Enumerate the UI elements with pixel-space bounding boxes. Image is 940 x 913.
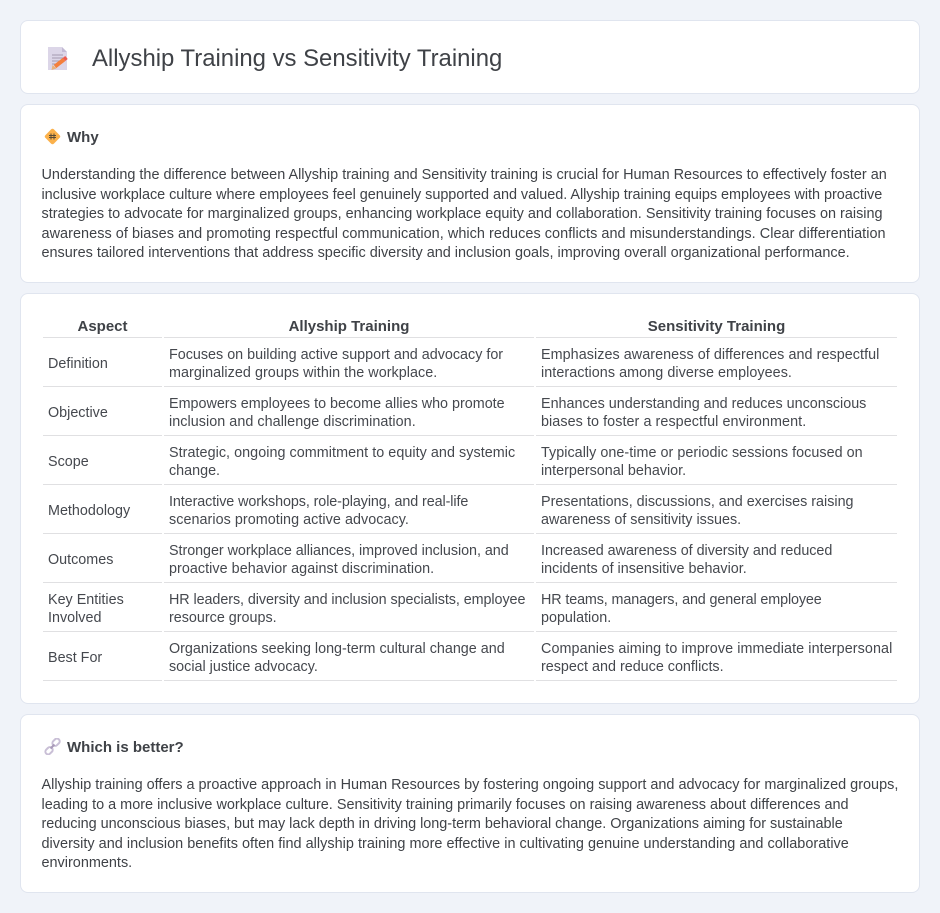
- row: methodology: awareness of sensitivity issues.: [541, 512, 741, 528]
- text block: which is better: Allyship training offers a proactive approach in Human Resources by fostering ongoing support and advocacy for marginalized groups,: [42, 777, 898, 793]
- text block: which is better: environments.: [42, 855, 132, 871]
- text block: which is better: [42, 777, 898, 871]
- text block: which is better: leading to a more inclusive workplace culture. Sensitivity training primarily focuses on raising awareness about differences and: [42, 796, 849, 812]
- row: methodology: [43, 494, 897, 534]
- table header: [43, 318, 897, 338]
- row: scope: change.: [169, 463, 220, 479]
- icon: warning diamond: [44, 128, 60, 144]
- title: Allyship Training vs Sensitivity Training: [92, 45, 502, 72]
- row: methodology: Methodology: [48, 503, 130, 519]
- row: best for: Best For: [48, 650, 102, 666]
- row: key entities involved: [43, 592, 897, 632]
- row: key entities involved: Involved: [48, 610, 101, 626]
- icon: memo with pencil: [48, 47, 68, 70]
- row: scope: [43, 445, 897, 485]
- row: definition: marginalized groups within the workplace.: [169, 365, 437, 381]
- table header: Aspect: [77, 318, 128, 335]
- text block: which is better: reducing unconscious biases, but may lack depth in driving long-term behavioral change. Organizations aiming for sustainable: [42, 816, 843, 832]
- text block: why: Understanding the difference between Allyship training and Sensitivity training is crucial for Human Resources to effectively foster an: [42, 167, 887, 183]
- text block: why: ensures tailored interventions that address specific diversity and inclusion goals, improving overall organizational performance.: [42, 245, 850, 261]
- row: objective: Enhances understanding and reduces unconscious: [541, 396, 866, 412]
- table header: Allyship Training: [289, 318, 409, 335]
- panel: comparison table: [20, 293, 920, 704]
- row: key entities involved: Key Entities: [48, 592, 124, 608]
- row: definition: Emphasizes awareness of differences and respectful: [541, 347, 879, 363]
- icon: chain link: [44, 738, 61, 755]
- row: definition: Definition: [48, 356, 108, 372]
- row: objective: [43, 396, 897, 436]
- row: definition: Focuses on building active support and advocacy for: [169, 347, 503, 363]
- text block: why: inclusive workplace culture where employees feel genuinely supported and valued. Allyship training equips employees with proactive: [42, 186, 882, 202]
- row: outcomes: incidents of insensitive behavior.: [541, 561, 747, 577]
- row: best for: respect and reduce conflicts.: [541, 659, 724, 675]
- row: key entities involved: population.: [541, 610, 611, 626]
- text block: which is better: diversity and inclusion benefits often find allyship training more effective in cultivating genuine understanding and collaborative: [42, 836, 849, 852]
- row: outcomes: Increased awareness of diversity and reduced: [541, 543, 832, 559]
- heading: why: Why: [67, 129, 99, 146]
- header panel: [20, 20, 920, 94]
- row: objective: Empowers employees to become allies who promote: [169, 396, 505, 412]
- row: best for: Organizations seeking long-term cultural change and: [169, 641, 505, 657]
- row: outcomes: proactive behavior against discrimination.: [169, 561, 434, 577]
- row: key entities involved: HR teams, managers, and general employee: [541, 592, 822, 608]
- row: objective: Objective: [48, 405, 108, 421]
- row: methodology: scenarios promoting active advocacy.: [169, 512, 409, 528]
- row: objective: inclusion and challenge discrimination.: [169, 414, 416, 430]
- panel: which is better: [20, 714, 920, 893]
- text block: why: [42, 167, 887, 261]
- text block: why: awareness of biases and promoting respectful communication, which reduces conflicts and misunderstandings. Clear differentiation: [42, 226, 886, 242]
- row: outcomes: [43, 543, 897, 583]
- row: objective: biases to foster a respectful environment.: [541, 414, 806, 430]
- row: definition: [43, 347, 897, 387]
- row: methodology: Presentations, discussions, and exercises raising: [541, 494, 854, 510]
- row: definition: interactions among diverse employees.: [541, 365, 792, 381]
- row: scope: Strategic, ongoing commitment to equity and systemic: [169, 445, 515, 461]
- row: scope: Scope: [48, 454, 89, 470]
- row: outcomes: Outcomes: [48, 552, 113, 568]
- panel: why: [20, 104, 920, 283]
- row: key entities involved: HR leaders, diversity and inclusion specialists, employee: [169, 592, 525, 608]
- table header: Sensitivity Training: [648, 318, 785, 335]
- row: best for: Companies aiming to improve immediate interpersonal: [541, 641, 892, 657]
- text block: why: strategies to advocate for marginalized groups, enhancing workplace equity and collaboration. Sensitivity training focuses on raising: [42, 206, 883, 222]
- row: best for: social justice advocacy.: [169, 659, 318, 675]
- row: key entities involved: resource groups.: [169, 610, 277, 626]
- row: scope: interpersonal behavior.: [541, 463, 686, 479]
- row: best for: [43, 641, 897, 681]
- row: methodology: Interactive workshops, role-playing, and real-life: [169, 494, 468, 510]
- row: scope: Typically one-time or periodic sessions focused on: [541, 445, 863, 461]
- row: outcomes: Stronger workplace alliances, improved inclusion, and: [169, 543, 509, 559]
- heading: which is better: Which is better?: [67, 739, 184, 756]
